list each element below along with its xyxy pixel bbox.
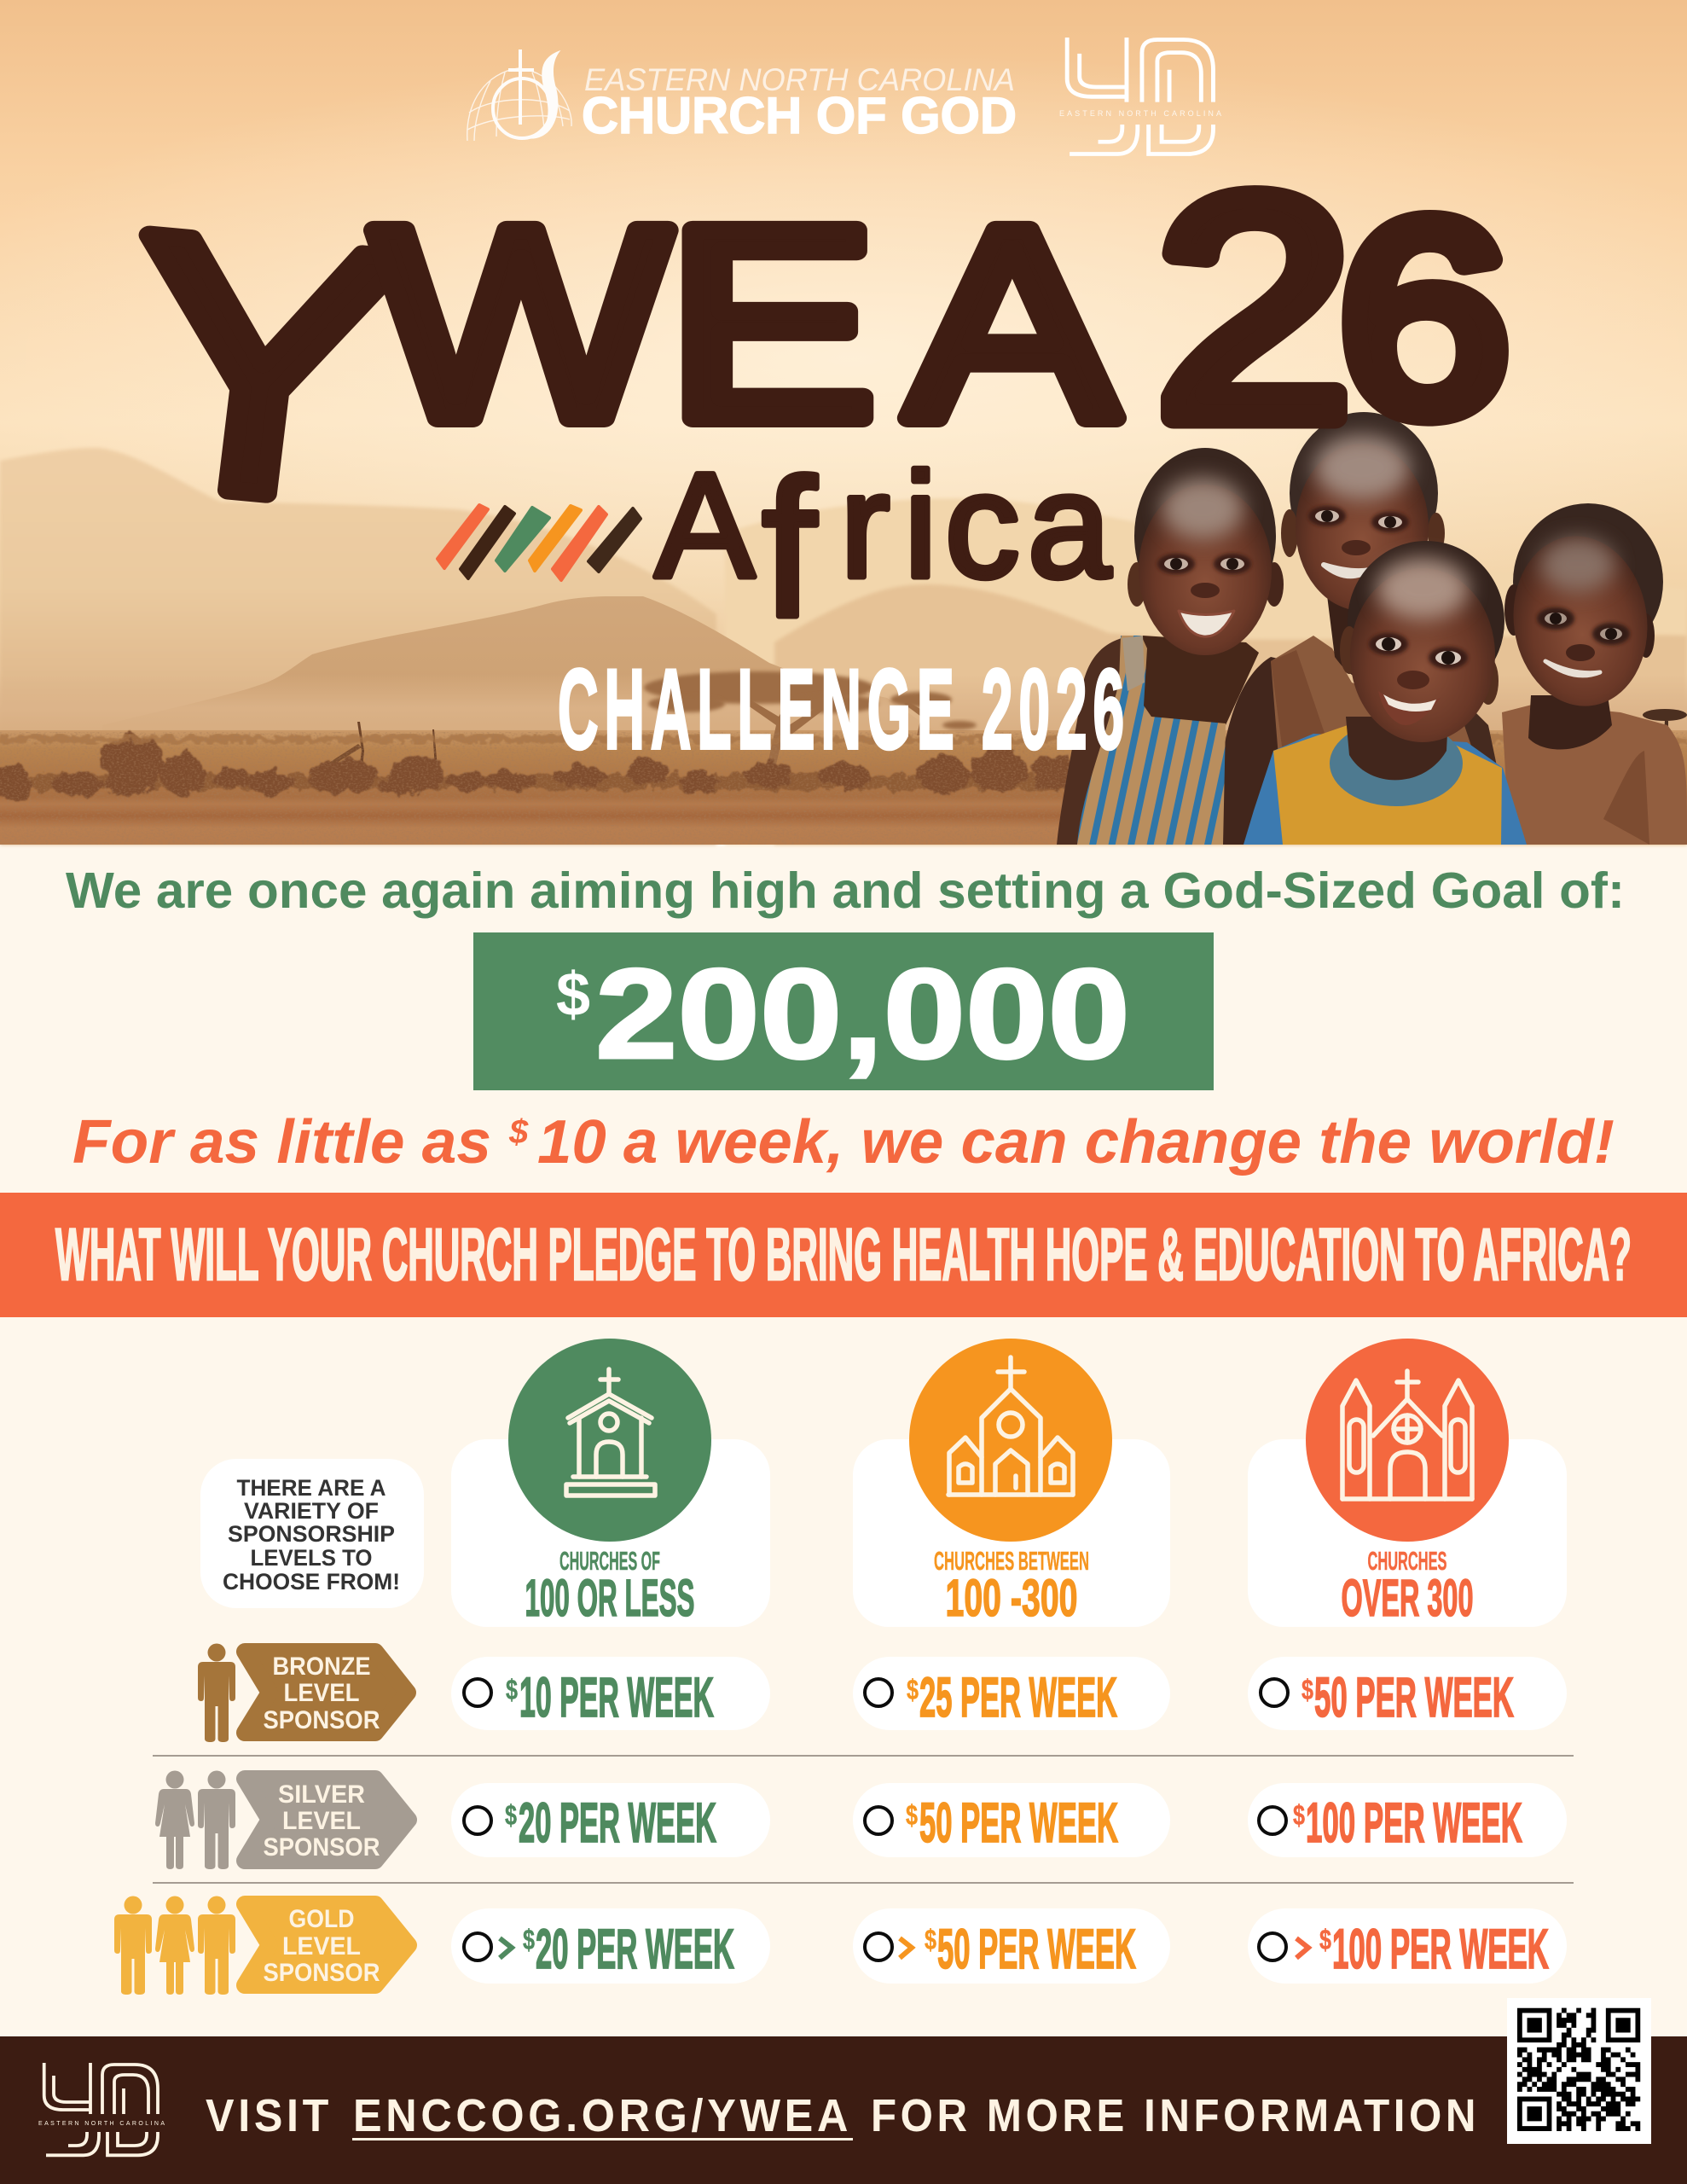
option: $50 per week: $	[1301, 1674, 1313, 1705]
footer call to action: VISIT	[206, 2090, 333, 2141]
subtitle: Africa: f	[762, 439, 817, 658]
callout: sponsorship levels: SPONSORSHIP	[228, 1521, 395, 1547]
title: YWEA 26: E	[667, 171, 876, 477]
icon: medium church	[948, 1357, 1073, 1495]
icon: globe, cross and flame	[467, 49, 571, 141]
decorative stripes	[438, 505, 641, 580]
option: $25 per week: $	[907, 1674, 919, 1705]
option: more than $20 per week: $	[523, 1924, 535, 1955]
option: more than $20 per week	[451, 1908, 770, 1984]
acacia trees	[316, 671, 1687, 776]
footer call to action: FOR MORE INFORMATION	[871, 2090, 1480, 2141]
column card: churches of 100 or less	[451, 1339, 770, 1627]
subtitle: Africa: c	[945, 443, 1020, 609]
column label large: 100 OR LESS	[525, 1569, 694, 1627]
tagline: 10 a week, we can change the world!	[537, 1108, 1615, 1176]
tagline: For as little as	[72, 1108, 491, 1176]
icon: small church	[566, 1369, 655, 1496]
callout: sponsorship levels	[200, 1459, 424, 1608]
tagline	[72, 1108, 1615, 1176]
option: $25 per week	[853, 1657, 1170, 1730]
row: silver level sponsor	[155, 1771, 1567, 1869]
column card: churches between 100-300	[853, 1339, 1170, 1627]
bronze label arrow: SPONSOR	[263, 1706, 380, 1734]
QR code	[1507, 1998, 1651, 2144]
option: $10 per week: $	[506, 1674, 518, 1705]
logo text line 1: EASTERN NORTH CAROLINA	[584, 62, 1015, 97]
row: bronze level sponsor	[198, 1643, 1567, 1742]
footer logo: EASTERN NORTH CAROLINA	[38, 2121, 165, 2127]
photo: four smiling children	[1057, 412, 1687, 845]
option: $20 per week	[451, 1783, 770, 1857]
title: YWEA 26	[101, 132, 1510, 580]
option: $10 per week	[451, 1657, 770, 1730]
goal amount box	[473, 932, 1214, 1090]
column label small: CHURCHES	[1368, 1546, 1446, 1576]
subtitle: Africa: A	[655, 443, 755, 609]
footer bar	[0, 2036, 1687, 2184]
icon: three people	[114, 1896, 235, 1995]
option: more than $50 per week: 50 PER WEEK	[937, 1917, 1136, 1980]
child 3 in front in yellow shirt	[1244, 541, 1527, 845]
option: $10 per week: 10 PER WEEK	[519, 1665, 714, 1728]
goal sentence: We are once again aiming high and setting a God-Sized Goal of:	[66, 863, 1625, 919]
silver label arrow: SPONSOR	[263, 1833, 380, 1862]
option: $25 per week: 25 PER WEEK	[919, 1665, 1117, 1728]
option: $50 per week: $	[906, 1799, 918, 1831]
option: more than $50 per week: $	[925, 1924, 936, 1955]
child 4 on the right in brown t-shirt	[1502, 503, 1687, 845]
option: $20 per week: $	[505, 1799, 517, 1831]
bronze label arrow: LEVEL	[283, 1679, 360, 1707]
callout: sponsorship levels: LEVELS TO	[251, 1545, 372, 1571]
option: $50 per week: 50 PER WEEK	[1314, 1665, 1514, 1728]
title: YWEA 26: W	[373, 171, 672, 477]
logo: YD Eastern North Carolina: EASTERN NORTH CAROLINA	[1059, 109, 1221, 118]
title: YWEA 26: Y	[101, 157, 423, 580]
option: $20 per week: 20 PER WEEK	[519, 1791, 716, 1854]
subtitle: Africa: a	[1028, 443, 1111, 609]
column label large: OVER 300	[1341, 1569, 1474, 1627]
goal number: 200,000	[595, 942, 1130, 1085]
option: more than $20 per week: 20 PER WEEK	[536, 1917, 734, 1980]
callout: sponsorship levels: VARIETY OF	[244, 1498, 379, 1524]
subtitle: Africa: i	[904, 443, 937, 609]
savanna bushes	[0, 735, 1109, 799]
gold label arrow: SPONSOR	[263, 1959, 380, 1987]
child 1 on the left in striped tank top	[1057, 448, 1284, 845]
footer logo	[38, 2063, 165, 2155]
heading: Challenge 2026: CHALLENGE 2026	[558, 647, 1130, 773]
gold label arrow	[245, 1904, 409, 1987]
subtitle: Africa: r	[840, 443, 890, 609]
hero photo: savanna landscape with haze and mountains	[0, 0, 1687, 845]
silver label arrow: LEVEL	[282, 1807, 361, 1835]
gold label arrow: LEVEL	[282, 1932, 361, 1960]
option: $50 per week: 50 PER WEEK	[919, 1791, 1118, 1854]
option: more than $100 per week: $	[1319, 1924, 1331, 1955]
tagline: $	[508, 1113, 529, 1151]
callout: sponsorship levels: CHOOSE FROM!	[223, 1569, 400, 1594]
logo: Eastern North Carolina Church of God	[467, 49, 1017, 144]
column label small: CHURCHES OF	[559, 1546, 660, 1576]
icon: two people	[155, 1771, 235, 1869]
silver label arrow: SILVER	[278, 1780, 365, 1809]
column card: churches over 300	[1248, 1339, 1567, 1627]
option: more than $100 per week	[1248, 1908, 1567, 1984]
option: more than $50 per week	[853, 1908, 1170, 1984]
column label large: 100 -300	[945, 1569, 1078, 1627]
logo: YD Eastern North Carolina	[1059, 38, 1221, 154]
row: gold level sponsor	[114, 1896, 1567, 1995]
footer call to action: ENCCOG.ORG/YWEA	[353, 2090, 852, 2141]
option: $100 per week	[1248, 1783, 1567, 1857]
option: $50 per week	[1248, 1657, 1567, 1730]
column label small: CHURCHES BETWEEN	[934, 1546, 1089, 1576]
bronze label arrow: BRONZE	[273, 1653, 370, 1681]
title: YWEA 26: 2	[1156, 132, 1353, 485]
gold label arrow: GOLD	[288, 1905, 355, 1933]
silver label arrow	[245, 1779, 409, 1862]
icon: one person	[198, 1643, 235, 1742]
child 2 at the back	[1218, 412, 1508, 845]
title: YWEA 26: 6	[1339, 165, 1510, 470]
option: $50 per week	[853, 1783, 1170, 1857]
bronze label arrow	[245, 1652, 408, 1734]
title: YWEA 26: A	[907, 171, 1118, 477]
option: $100 per week: $	[1293, 1799, 1305, 1831]
callout: sponsorship levels: THERE ARE A	[237, 1475, 386, 1501]
orange banner	[0, 1193, 1687, 1317]
goal dollar sign: $	[556, 961, 590, 1029]
logo text line 2: CHURCH OF GOD	[582, 87, 1017, 144]
icon: large church	[1342, 1371, 1472, 1499]
